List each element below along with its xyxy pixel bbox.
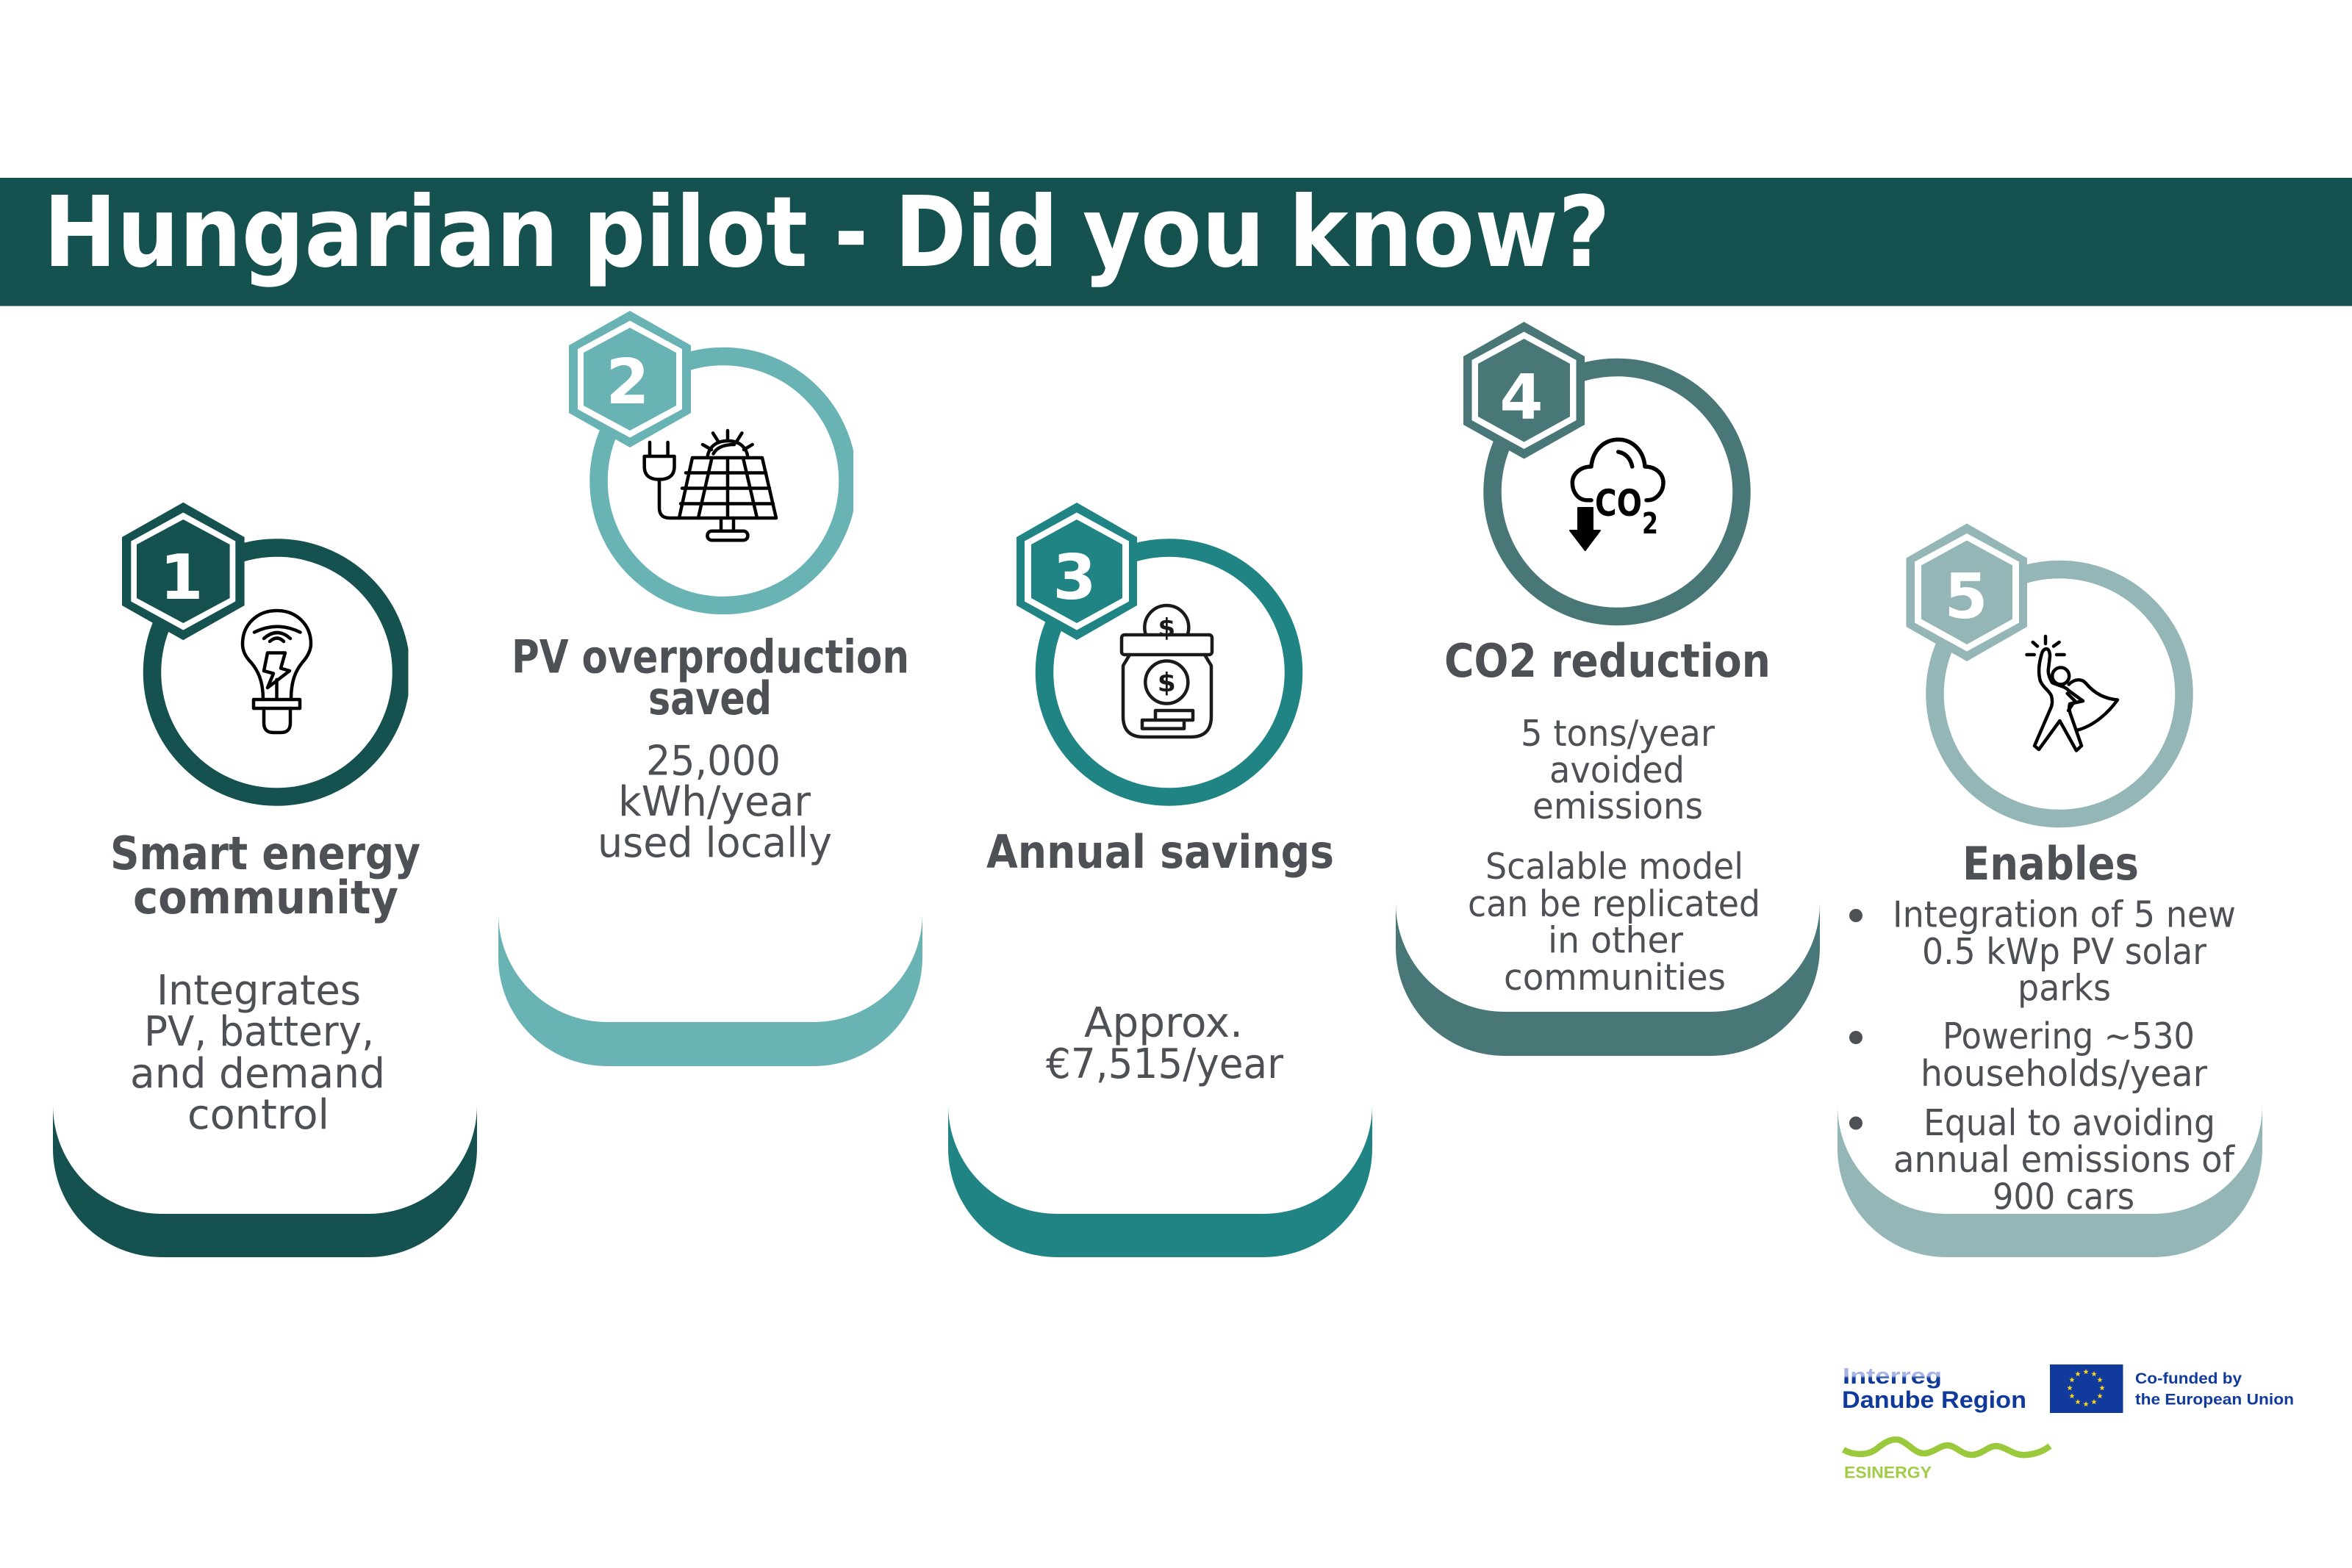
- body text: Approx.: [1084, 999, 1243, 1047]
- bullet list: [1849, 893, 2236, 1218]
- title: know?: [1288, 176, 1610, 289]
- icon: savings jar: $: [1158, 614, 1175, 643]
- title: pilot: [583, 176, 808, 289]
- card base: [53, 890, 477, 1257]
- heading: [110, 827, 420, 924]
- body text: control: [187, 1091, 329, 1139]
- card base: [498, 698, 922, 1066]
- number badge 1: 1: [159, 542, 204, 614]
- body text: 25,000: [646, 738, 781, 785]
- body text: scalable model: in other: [1548, 920, 1684, 962]
- icon: CO2 cloud with down arrow: [1570, 439, 1663, 550]
- bullet item: households: [1849, 1015, 2208, 1095]
- body text: Integrates: [157, 967, 361, 1015]
- icon: light bulb: [243, 611, 311, 733]
- number badge 5: [1907, 523, 2027, 661]
- logo: ESINERGY wave: [1843, 1439, 2050, 1482]
- icon: CO2 cloud with down arrow: CO: [1595, 482, 1642, 525]
- icon: savings jar: [1122, 605, 1212, 737]
- number badge 2: [569, 311, 691, 447]
- title banner: [0, 176, 2352, 306]
- body text: used locally: [598, 819, 832, 867]
- icon: superhero: [2027, 636, 2118, 751]
- heading: CO2 reduction: [1444, 634, 1771, 688]
- panel: PV overproduction saved: [498, 311, 922, 1066]
- body text: scalable model: [1468, 846, 1760, 999]
- panel: annual savings: [948, 503, 1372, 1257]
- bullet item: solar parks: 0.5 kWp PV solar: [1922, 931, 2207, 973]
- heading: [512, 630, 909, 725]
- body text: scalable model: can be replicated: [1468, 883, 1760, 925]
- body text: emissions: [1521, 713, 1715, 827]
- number badge 3: [1017, 503, 1137, 640]
- icon: savings jar: $: [1158, 668, 1176, 698]
- body text: emissions: avoided: [1549, 749, 1685, 791]
- logo: Interreg Danube Region: Danube Region: [1842, 1387, 2026, 1413]
- logos: [1842, 1363, 2294, 1482]
- bullet item: cars: Equal to avoiding: [1923, 1102, 2215, 1144]
- card base: [1838, 889, 2262, 1257]
- heading: Enables: [1962, 837, 2139, 891]
- heading: PV overproduction: [512, 630, 909, 684]
- panel: CO2 reduction: [1396, 322, 1820, 1056]
- heading: saved: [648, 672, 772, 725]
- ring: [1935, 569, 2184, 819]
- bullet item: cars: 900 cars: [1993, 1176, 2134, 1218]
- bullet item: solar parks: Integration of 5 new: [1893, 893, 2236, 936]
- ring: [1492, 367, 1742, 616]
- logo: Interreg Danube Region: [1842, 1363, 2026, 1413]
- bullet item: households: households/year: [1921, 1053, 2208, 1095]
- ring: [152, 548, 401, 796]
- body text: [598, 738, 832, 867]
- number badge 4: 4: [1499, 362, 1544, 434]
- card face: [1396, 683, 1820, 1012]
- bullet item: cars: [1849, 1102, 2236, 1218]
- card face: [498, 698, 922, 1022]
- title: -: [834, 176, 868, 289]
- co-funded text: the European Union: [2135, 1392, 2294, 1409]
- body text: and demand: [130, 1050, 385, 1098]
- title: Did: [894, 176, 1058, 289]
- title: you: [1083, 176, 1265, 289]
- body text: [130, 967, 385, 1139]
- body text: scalable model: communities: [1504, 957, 1726, 999]
- body text: emissions: emissions: [1532, 785, 1703, 827]
- number badge 5: 5: [1944, 561, 1988, 633]
- heading: community: [133, 871, 398, 924]
- logo: Interreg Danube Region: Interreg: [1843, 1363, 1942, 1389]
- body text: [1046, 999, 1284, 1088]
- card face: [1838, 889, 2262, 1214]
- panel: enables: [1838, 523, 2262, 1257]
- body text: €7,515/year: [1046, 1040, 1284, 1088]
- number badge 2: 2: [606, 346, 650, 419]
- ring: [1044, 548, 1294, 796]
- heading: Smart energy: [110, 827, 420, 880]
- logo: EU flag: [2050, 1364, 2123, 1413]
- body text: PV, battery,: [144, 1008, 374, 1056]
- icon: solar panel with plug: [645, 431, 776, 540]
- co-funded text: [2135, 1370, 2294, 1409]
- bullet item: households: Powering ~530: [1943, 1015, 2195, 1057]
- card face: [53, 890, 477, 1214]
- body text: scalable model: Scalable model: [1485, 846, 1743, 888]
- title: Hungarian: [43, 176, 559, 289]
- body text: emissions: 5 tons/year: [1521, 713, 1715, 755]
- card base: [1396, 683, 1820, 1056]
- icon: CO2 cloud with down arrow: 2: [1642, 507, 1658, 541]
- ring: [598, 356, 848, 605]
- number badge 4: [1463, 322, 1585, 458]
- bullet item: solar parks: parks: [2018, 967, 2111, 1010]
- bullet item: solar parks: [1849, 893, 2236, 1010]
- card face: [948, 890, 1372, 1214]
- panel: smart energy community: [53, 503, 477, 1257]
- title: [43, 176, 1610, 289]
- card base: [948, 890, 1372, 1257]
- number badge 3: 3: [1053, 542, 1097, 614]
- number badge 1: [122, 503, 245, 640]
- co-funded text: Co-funded by: [2135, 1370, 2242, 1387]
- heading: Annual savings: [986, 825, 1334, 879]
- body text: kWh/year: [618, 778, 811, 826]
- bullet item: cars: annual emissions of: [1893, 1139, 2236, 1181]
- logo: ESINERGY wave: ESINERGY: [1844, 1464, 1932, 1482]
